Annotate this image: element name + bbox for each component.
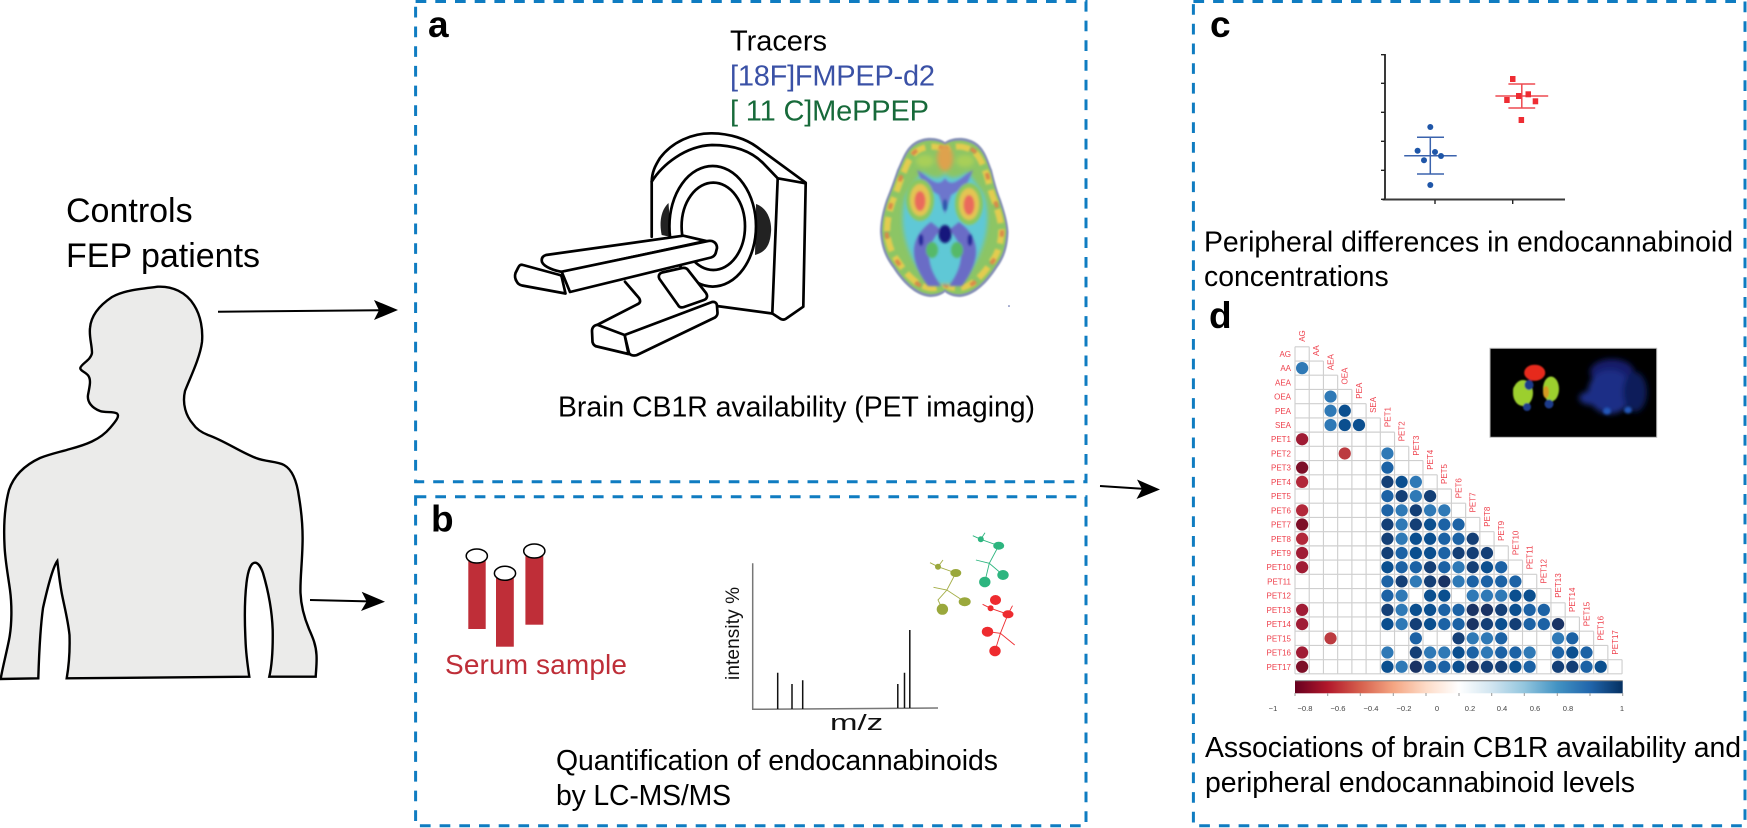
column labels: PET4 xyxy=(1426,449,1435,470)
column labels: PET8 xyxy=(1483,506,1492,527)
row labels: OEA xyxy=(1274,393,1292,402)
column labels xyxy=(1298,330,1620,655)
row labels: PET15 xyxy=(1267,634,1292,643)
row labels: PET9 xyxy=(1271,549,1292,558)
column labels: PET2 xyxy=(1398,421,1406,441)
row labels: PET11 xyxy=(1267,577,1292,586)
column labels: PET11 xyxy=(1526,545,1534,569)
icon: red molecule xyxy=(982,595,1015,656)
tracers list: [18F]FMPEP-d2 xyxy=(730,61,935,93)
caption: panel d xyxy=(1205,732,1741,799)
arrow: head to panel a xyxy=(218,300,398,320)
heading: controls and FEP patients xyxy=(66,192,260,275)
panel c and d frame xyxy=(1193,2,1745,826)
column labels: PET14 xyxy=(1568,587,1577,612)
column labels: PEA xyxy=(1355,382,1364,399)
row labels: PET5 xyxy=(1271,492,1292,501)
colour bar legend: −0.6 xyxy=(1330,704,1346,713)
arrow: body to panel b xyxy=(310,592,385,611)
chart: correlation matrix xyxy=(1267,330,1624,713)
column labels: PET6 xyxy=(1454,478,1463,498)
caption: panel b xyxy=(556,745,998,812)
row labels: AEA xyxy=(1275,378,1292,387)
caption: panel d: Associations of brain CB1R availability and xyxy=(1205,732,1741,764)
column labels: OEA xyxy=(1341,367,1350,384)
column labels: PET1 xyxy=(1383,407,1392,427)
caption: panel c: concentrations xyxy=(1204,261,1389,293)
icon: olive molecule xyxy=(930,560,971,615)
tracers list: [ 11 C]MePPEP xyxy=(730,96,929,128)
panel letter b: b xyxy=(431,499,454,540)
row labels: PEA xyxy=(1275,407,1292,416)
chart: scatter plot of concentrations xyxy=(1381,54,1565,204)
row labels: AG xyxy=(1279,350,1291,359)
caption: panel b: by LC-MS/MS xyxy=(556,780,731,812)
colour bar legend: 0.2 xyxy=(1465,704,1475,713)
colour bar legend: −1 xyxy=(1269,704,1277,713)
column labels: SEA xyxy=(1369,396,1378,413)
column labels: AEA xyxy=(1326,354,1335,370)
caption: panel c xyxy=(1204,227,1733,293)
chart: mass spectrum: m/z xyxy=(830,710,883,735)
colour bar legend: 0.4 xyxy=(1497,704,1507,713)
column labels: PET17 xyxy=(1611,630,1620,655)
arrow: panels a and b to panels c and d xyxy=(1100,480,1160,499)
caption: panel a: Brain CB1R availability (PET imaging) xyxy=(558,392,1035,424)
row labels: PET8 xyxy=(1271,535,1292,544)
column labels: AG xyxy=(1298,330,1307,342)
colour bar legend: 0.8 xyxy=(1563,704,1573,713)
column labels: AA xyxy=(1312,345,1321,356)
row labels: PET10 xyxy=(1267,563,1292,572)
row labels: PET12 xyxy=(1267,592,1292,601)
caption: panel c: Peripheral differences in endocannabinoid xyxy=(1204,227,1733,259)
icon: serum sample tubes xyxy=(466,544,545,647)
chart: mass spectrum: intensity % xyxy=(723,587,744,680)
row labels: AA xyxy=(1280,364,1292,373)
column labels: PET10 xyxy=(1511,530,1520,555)
row labels: PET16 xyxy=(1267,648,1292,658)
panel b frame xyxy=(416,497,1086,826)
row labels: PET7 xyxy=(1271,521,1292,530)
panel letter c: c xyxy=(1210,4,1231,45)
row labels: PET1 xyxy=(1271,435,1292,444)
colour bar legend: −0.2 xyxy=(1396,704,1412,713)
row labels: PET13 xyxy=(1267,606,1292,615)
colour bar legend: 1 xyxy=(1620,704,1624,713)
row labels: PET6 xyxy=(1271,506,1292,515)
panel a frame xyxy=(416,2,1086,482)
colour bar legend: 0 xyxy=(1435,704,1439,713)
row labels xyxy=(1267,350,1292,672)
row labels: PET2 xyxy=(1271,450,1292,458)
colour bar legend: −0.8 xyxy=(1298,704,1312,713)
tracers list xyxy=(730,26,935,128)
icon: PET scanner xyxy=(515,133,806,355)
row labels: PET4 xyxy=(1271,478,1292,487)
panel letter d: d xyxy=(1209,295,1232,336)
tracers list: Tracers xyxy=(730,26,827,58)
row labels: PET3 xyxy=(1271,464,1292,473)
heading: controls and FEP patients: FEP patients xyxy=(66,237,260,275)
colour bar legend xyxy=(1269,681,1624,713)
panel letter a: a xyxy=(428,4,449,45)
row labels: PET14 xyxy=(1267,620,1292,629)
column labels: PET12 xyxy=(1540,558,1549,584)
caption: panel d: peripheral endocannabinoid levels xyxy=(1205,767,1635,799)
column labels: PET16 xyxy=(1597,615,1606,640)
column labels: PET3 xyxy=(1412,435,1421,456)
caption: panel b: Quantification of endocannabinoids xyxy=(556,745,998,777)
column labels: PET15 xyxy=(1582,601,1591,626)
colour bar legend: 0.6 xyxy=(1530,704,1540,713)
heading: controls and FEP patients: Controls xyxy=(66,192,193,230)
row labels: PET17 xyxy=(1267,663,1292,672)
matrix grid and dots xyxy=(1295,347,1622,674)
brain regions image xyxy=(1490,348,1657,437)
column labels: PET7 xyxy=(1469,492,1478,512)
brain PET scan image xyxy=(880,138,1010,307)
label: serum sample: Serum sample xyxy=(445,649,627,680)
chart: mass spectrum xyxy=(723,563,938,735)
icon: green molecule xyxy=(973,533,1009,587)
column labels: PET9 xyxy=(1497,520,1506,541)
column labels: PET5 xyxy=(1440,463,1449,484)
column labels: PET13 xyxy=(1554,573,1563,598)
row labels: SEA xyxy=(1275,421,1292,430)
icon: human body silhouette xyxy=(1,287,317,679)
colour bar legend: −0.4 xyxy=(1364,704,1378,713)
